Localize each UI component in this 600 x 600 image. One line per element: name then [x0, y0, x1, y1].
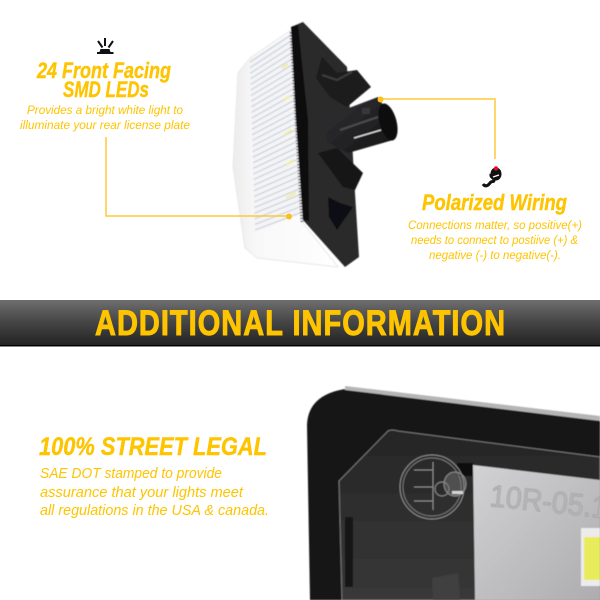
description: street legal — [40, 465, 269, 519]
white reflector board — [473, 465, 600, 600]
lamp black mounting plate — [291, 22, 359, 267]
product photo: license plate lamp — [233, 22, 401, 267]
SMD LED — [581, 528, 600, 586]
description: LEDs: Provides a bright white light to — [27, 103, 183, 117]
icon: polarized wire — [483, 166, 502, 186]
leader line: LEDs — [106, 137, 292, 220]
product photo: lamp close-up — [307, 386, 600, 600]
housing outer frame — [307, 389, 600, 600]
heading: LEDs — [36, 58, 171, 102]
text block: 24 front facing LEDs — [20, 58, 190, 132]
wiring connector — [325, 97, 401, 153]
lower mounting clip — [318, 148, 363, 190]
heading: wiring: Polarized Wiring — [422, 190, 567, 215]
frame top highlight — [345, 386, 600, 421]
description: LEDs — [20, 103, 190, 132]
lower clip — [432, 573, 460, 600]
description: wiring: Connections matter, so positive(+) — [408, 218, 582, 232]
banner: additional information — [0, 300, 600, 347]
text block: street legal — [39, 433, 269, 519]
lamp lens — [233, 30, 338, 267]
dark window above board — [457, 463, 473, 476]
left dark strip — [345, 517, 353, 587]
description: wiring — [408, 218, 582, 262]
description: wiring: negative (-) to negative(-). — [429, 248, 561, 262]
embossed stamp circle — [400, 455, 466, 519]
heading: LEDs: 24 Front Facing — [36, 58, 171, 83]
description: street legal: assurance that your lights meet — [40, 484, 244, 501]
heading: LEDs: SMD LEDs — [63, 77, 149, 102]
upper mounting clip — [316, 57, 371, 107]
text block: polarized wiring — [408, 190, 582, 262]
description: LEDs: illuminate your rear license plate — [20, 118, 190, 132]
lower slot — [328, 197, 353, 230]
leader line: wiring — [378, 96, 495, 159]
icon: LED light — [97, 38, 114, 54]
description: street legal: SAE DOT stamped to provide — [40, 465, 222, 482]
description: street legal: all regulations in the USA & canada. — [40, 502, 269, 519]
heading: street legal: 100% STREET LEGAL — [39, 433, 267, 461]
inner clear panel — [339, 430, 600, 600]
plate dark rim — [291, 25, 309, 221]
banner heading: ADDITIONAL INFORMATION — [95, 303, 505, 343]
description: wiring: needs to connect to postiive (+) & — [411, 233, 578, 247]
